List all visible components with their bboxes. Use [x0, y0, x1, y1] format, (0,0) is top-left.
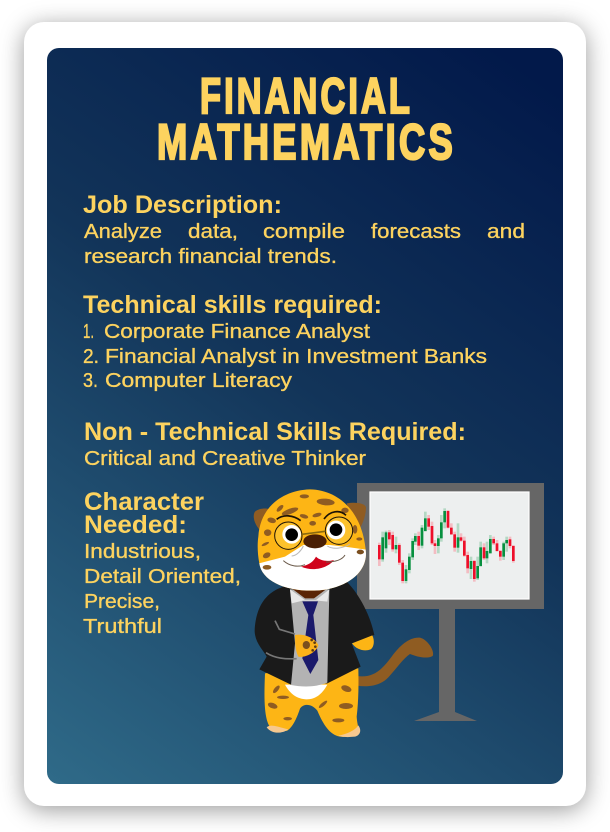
text block: job description [83, 191, 525, 268]
presentation board [357, 483, 544, 609]
title [157, 68, 456, 170]
shirt [290, 589, 329, 687]
panel: blue background [47, 48, 563, 784]
left hand [295, 635, 318, 657]
text block: job description: compile [263, 220, 345, 243]
mouth [283, 544, 350, 569]
head [258, 489, 366, 591]
belly [285, 685, 327, 699]
candlestick chart [370, 492, 529, 599]
text block: job description: research financial trends. [84, 245, 337, 268]
text block: non-technical skills: Non - Technical Skills Required: [84, 418, 466, 446]
text block: technical skills: Corporate Finance Analyst [104, 320, 370, 343]
text block: technical skills [83, 291, 487, 392]
text block: non-technical skills: Critical and Creative Thinker [84, 447, 366, 470]
text block: technical skills: 1. [83, 320, 94, 343]
text block: job description: forecasts [371, 220, 461, 243]
text block: technical skills: Technical skills required: [83, 291, 382, 319]
collar [290, 589, 329, 603]
text block: technical skills: 3. [83, 369, 98, 392]
text block: character needed: Truthful [83, 615, 162, 638]
presentation board stand [414, 609, 477, 721]
text block: character needed [83, 488, 241, 638]
ears [254, 503, 366, 533]
text block: character needed: Needed: [84, 511, 187, 539]
tail [357, 638, 433, 686]
text block: technical skills: 2. [83, 345, 99, 368]
legs [264, 667, 358, 737]
eyebrows [277, 512, 346, 521]
head spots [261, 494, 364, 570]
text block: job description: Analyze [84, 220, 162, 243]
text block: character needed: Detail Oriented, [84, 565, 241, 588]
tie [302, 601, 318, 674]
title: MATHEMATICS [157, 114, 456, 170]
text block: technical skills: Computer Literacy [105, 369, 293, 392]
neck [292, 588, 327, 598]
text block: job description: and [487, 220, 525, 243]
muzzle [257, 545, 368, 593]
text block: technical skills: Financial Analyst in Investment Banks [105, 345, 487, 368]
right hand [352, 635, 374, 650]
title: FINANCIAL [200, 68, 413, 124]
text block: character needed: Precise, [84, 590, 160, 613]
feet [267, 725, 360, 737]
text block: character needed: Character [84, 488, 204, 516]
text block: character needed: Industrious, [84, 540, 201, 563]
jacket [255, 582, 374, 685]
sleeve lines [266, 621, 297, 659]
leopard mascot [254, 489, 433, 737]
leg spots [267, 684, 353, 722]
glasses [275, 517, 353, 549]
text block: non-technical skills [84, 418, 466, 470]
text block: job description: Job Description: [83, 191, 282, 219]
text block: job description: data, [188, 220, 238, 243]
nose [303, 534, 327, 548]
